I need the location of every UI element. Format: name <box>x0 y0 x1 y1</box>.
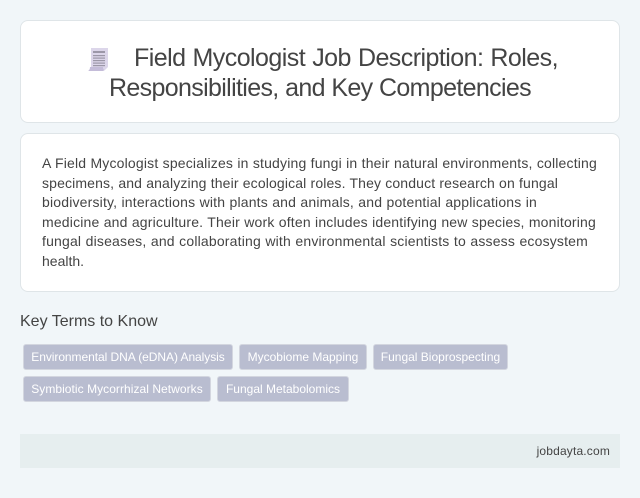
tag: Fungal Bioprospecting <box>381 350 500 364</box>
tag: Fungal Metabolomics <box>226 382 340 396</box>
title text: Field Mycologist Job Description: Roles, <box>134 44 558 72</box>
tag <box>373 344 508 370</box>
footer source text: jobdayta.com <box>537 444 610 458</box>
key terms tags <box>23 344 508 402</box>
tag: Symbiotic Mycorrhizal Networks <box>31 382 203 396</box>
tag <box>23 344 233 370</box>
tag <box>217 376 349 402</box>
icon: document scroll <box>88 48 108 71</box>
tag: Mycobiome Mapping <box>248 350 358 364</box>
footer bar <box>20 434 620 468</box>
title panel <box>20 20 620 123</box>
description text <box>42 155 597 269</box>
description text: biodiversity, interactions with plants and animals, and potential applications in <box>42 194 537 210</box>
heading: key terms: Key Terms to Know <box>20 313 158 330</box>
description text: medicine and agriculture. Their work often includes identifying new species, monitoring <box>42 214 596 230</box>
tag: Environmental DNA (eDNA) Analysis <box>31 350 225 364</box>
description panel <box>20 133 620 292</box>
tag <box>239 344 367 370</box>
description text: specimens, and analyzing their ecological roles. They conduct research on fungal <box>42 175 558 191</box>
description text: fungal diseases, and collaborating with environmental scientists to assess ecosystem <box>42 233 588 249</box>
title text <box>109 44 558 102</box>
description text: A Field Mycologist specializes in studying fungi in their natural environments, collecting <box>42 155 597 171</box>
title text: Responsibilities, and Key Competencies <box>109 74 531 102</box>
description text: health. <box>42 253 84 269</box>
tag <box>23 376 211 402</box>
